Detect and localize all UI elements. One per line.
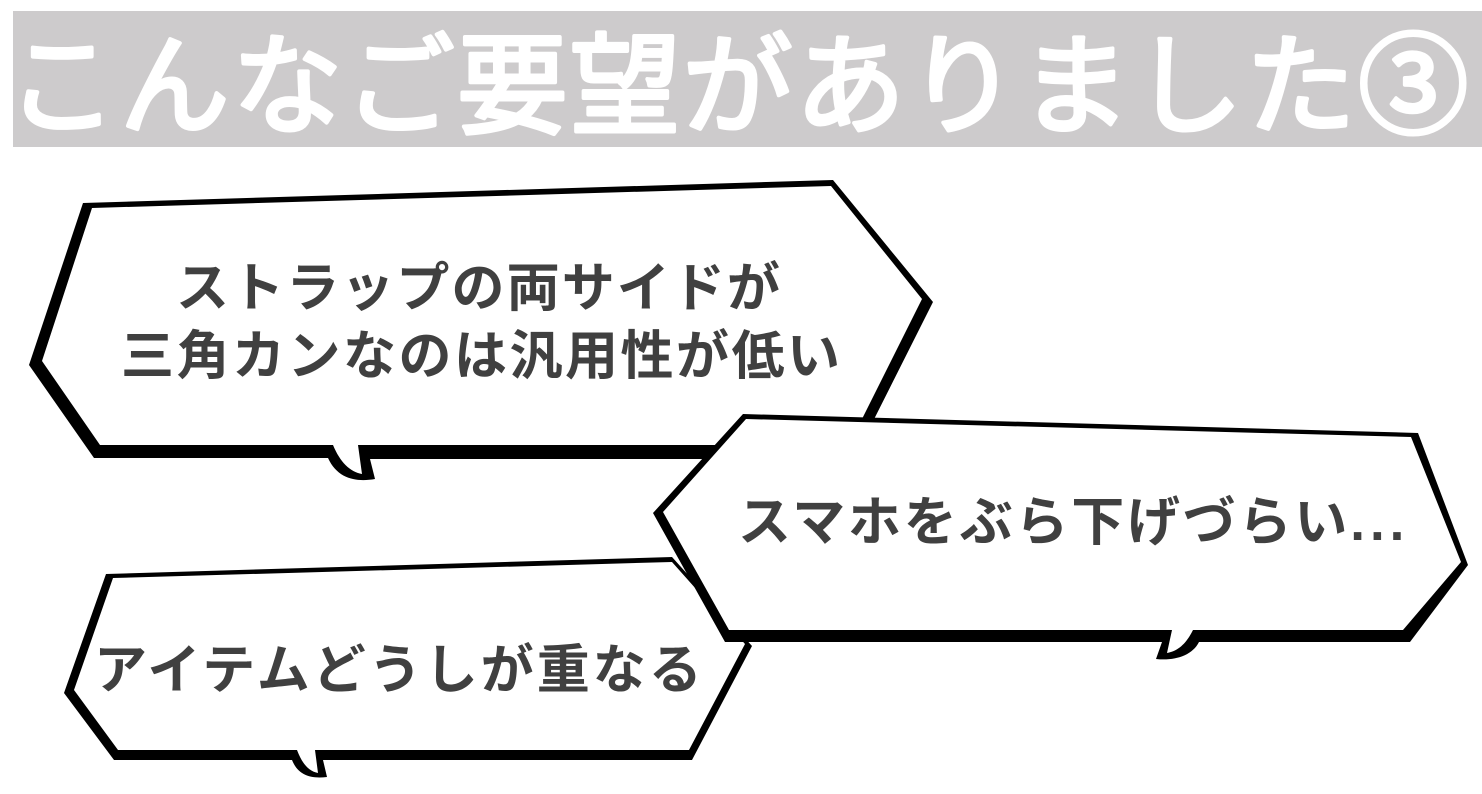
bubble text: strap: ストラップの両サイドが bbox=[176, 259, 782, 318]
title banner bbox=[7, 11, 1482, 149]
bubble text: phone: スマホをぶら下げづらい... bbox=[738, 493, 1409, 552]
bubble text: strap: 三角カンなのは汎用性が低い bbox=[121, 327, 842, 386]
bubble text: strap bbox=[121, 259, 842, 386]
title text: こんなご要望がありました③ bbox=[7, 26, 1471, 149]
bubble text: items: アイテムどうしが重なる bbox=[94, 641, 705, 700]
speech bubble: items overlap bbox=[64, 557, 752, 777]
speech bubble: strap triangle rings bbox=[29, 180, 933, 480]
speech bubble: hard to hang phone bbox=[653, 414, 1468, 659]
